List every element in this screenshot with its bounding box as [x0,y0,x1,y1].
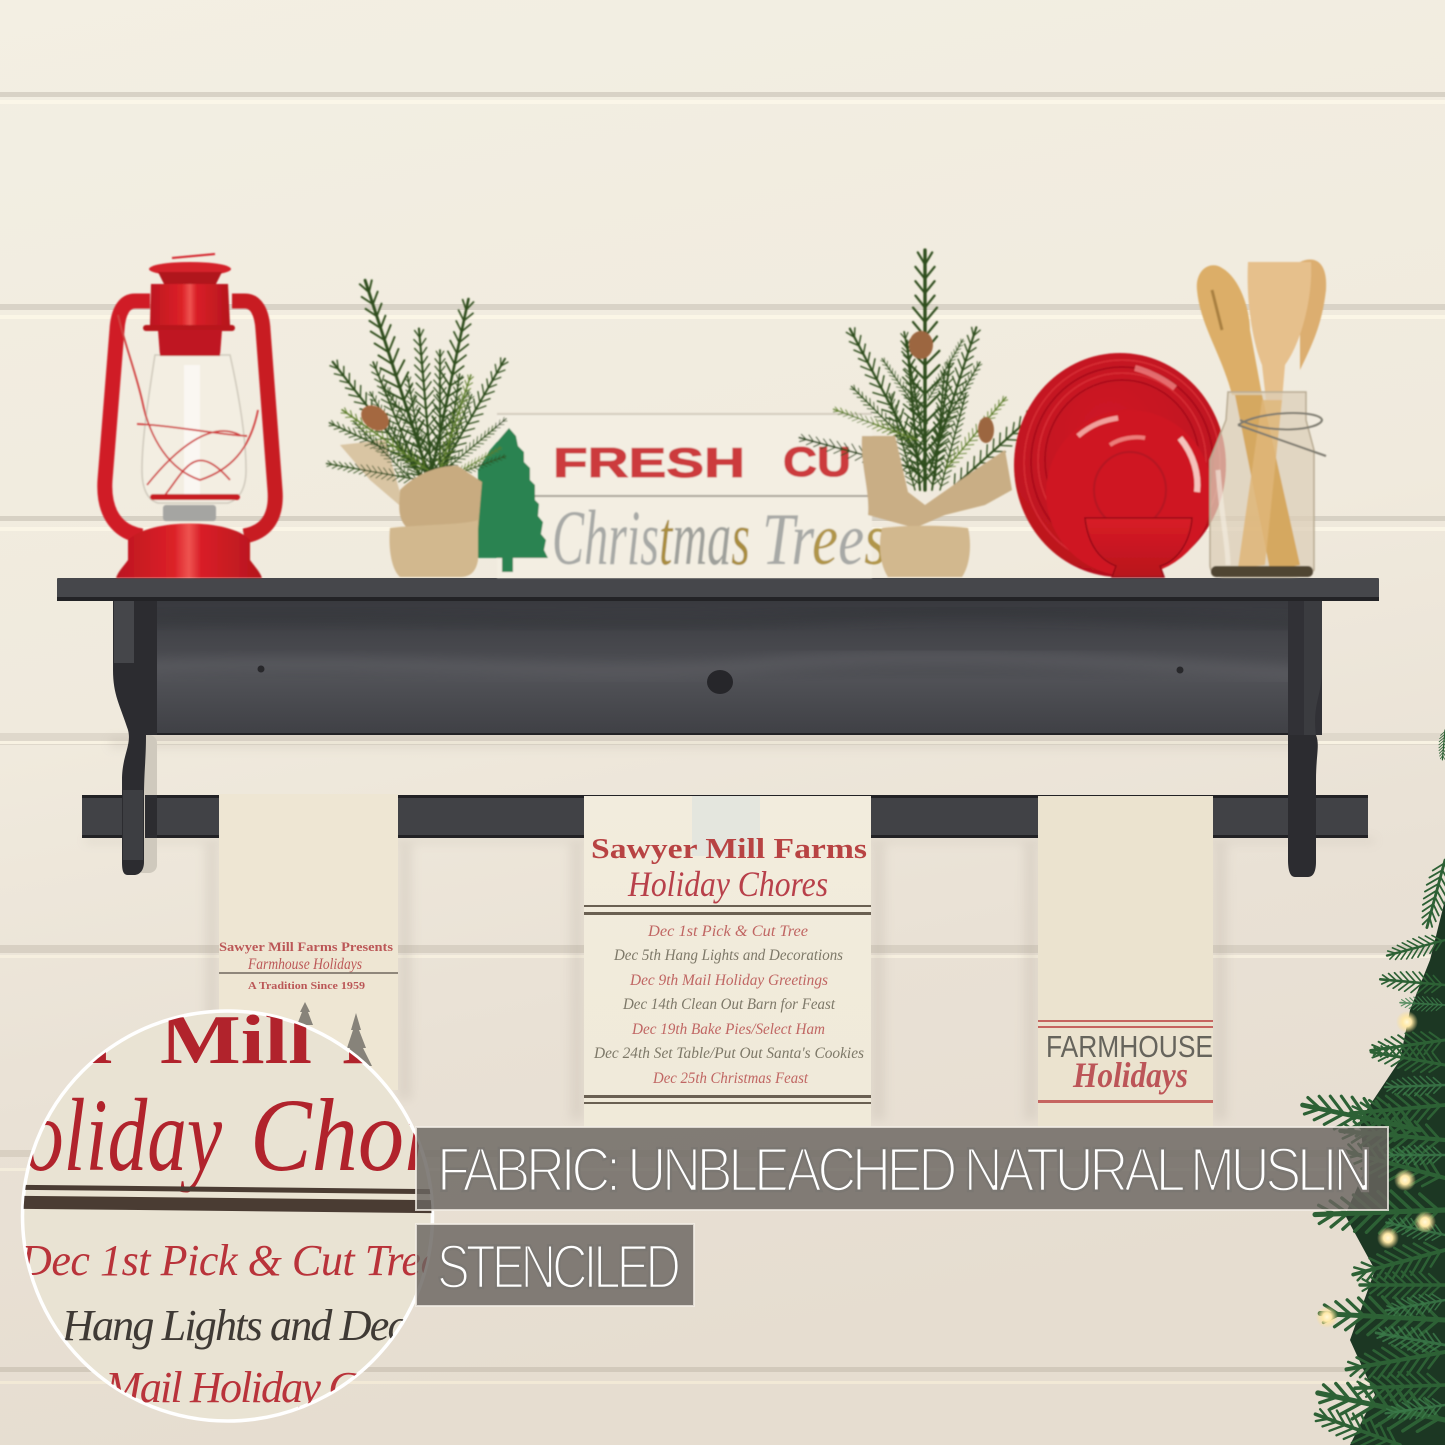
magnified line two: Hang Lights and Dec [61,1301,407,1350]
wooden utensils [1197,259,1326,400]
chores list: Dec 9th Mail Holiday Greetings [629,972,828,989]
middle towel top stripes [584,905,871,915]
pine cone [356,400,394,436]
magnified line one: Dec 1st Pick & Cut Tree [19,1236,440,1285]
middle towel script title: Holiday Chores [627,864,828,904]
chores list: Dec 1st Pick & Cut Tree [647,923,808,940]
magnified heading: r [90,1002,121,1079]
Holidays script: Holidays [1072,1055,1188,1095]
lantern wire guard [118,315,258,495]
sign heading: FRESH [553,439,745,486]
left towel script line: Farmhouse Holidays [247,956,362,973]
magnified heading: Mill [160,1002,312,1079]
lantern [105,254,275,578]
pine cones [909,331,994,443]
sign script lettering second word: Trees [762,499,887,581]
sign heading cut off by burlap: CU [783,438,851,485]
sprig branches [797,250,1064,496]
small plate [1046,410,1212,576]
towel rod [82,795,1368,838]
stacked red plates [1014,353,1226,577]
wall shelf [57,578,1379,877]
left towel heading: Sawyer Mill Farms Presents [219,939,393,954]
lantern burner ring [150,494,240,500]
magnified script title second word: Chor [250,1078,440,1193]
magnified heading: F [342,1002,385,1079]
lantern frame [105,301,150,536]
chores list: Dec 24th Set Table/Put Out Santa's Cookies [593,1045,864,1062]
right towel upper stripes [1038,1020,1213,1028]
jar bail wire [1238,413,1326,456]
left towel [219,794,398,1090]
sprig branches [325,276,512,486]
middle towel [584,796,871,1128]
burlap wrap [862,436,1012,528]
glass jar with utensils [1210,392,1326,577]
left potted sprig [325,276,512,577]
Fresh Cut Christmas Trees sign [497,413,887,581]
shelf back board [120,600,1320,735]
left towel stripe [219,972,398,974]
magnified fabric detail circle [19,1002,440,1421]
chores list [593,923,864,1087]
left bracket [113,600,157,875]
caption: stenciled: STENCILED [437,1233,679,1302]
left towel tagline: A Tradition Since 1959 [248,980,366,992]
caption: stenciled [416,1224,694,1306]
sign script lettering: Christmas [552,494,750,581]
burlap wrap [399,466,482,530]
lantern base [116,524,262,578]
magnified script title: oliday [24,1078,223,1193]
middle towel bottom stripes [584,1095,871,1104]
icon: green metal tree [478,428,548,572]
shelf top plank [57,578,1379,601]
chores list: Dec 5th Hang Lights and Decorations [613,947,843,964]
right towel [1038,796,1213,1128]
lantern collar [163,505,216,521]
left towel pine trees [297,1002,372,1066]
right bracket [1288,600,1322,877]
string lights [1316,1011,1436,1328]
shelf decor [105,250,1326,581]
chores list: Dec 19th Bake Pies/Select Ham [631,1021,825,1038]
magnified line three: Mail Holiday G [104,1363,360,1412]
fir branches [1299,730,1445,1445]
shadows under shelf and beside towels [85,738,1375,1120]
burlap pot [389,520,478,577]
Christmas tree [1299,730,1445,1445]
burlap pot [880,526,970,577]
FARMHOUSE wordmark: FARMHOUSE [1046,1029,1213,1064]
magnified heading [92,1014,363,1064]
magnified stripes [20,1185,440,1213]
chores list: Dec 25th Christmas Feast [652,1070,809,1087]
chores list: Dec 14th Clean Out Barn for Feast [622,996,836,1013]
lantern top cap [149,254,231,284]
middle towel heading: Sawyer Mill Farms [591,834,867,865]
lantern glass [142,355,246,503]
right towel lower stripes [1038,1100,1213,1103]
burlap leaf back [340,440,405,510]
right potted sprig [797,250,1064,577]
lantern upper drum [150,284,230,325]
red bowl [1085,518,1192,577]
large plate [1014,353,1226,577]
